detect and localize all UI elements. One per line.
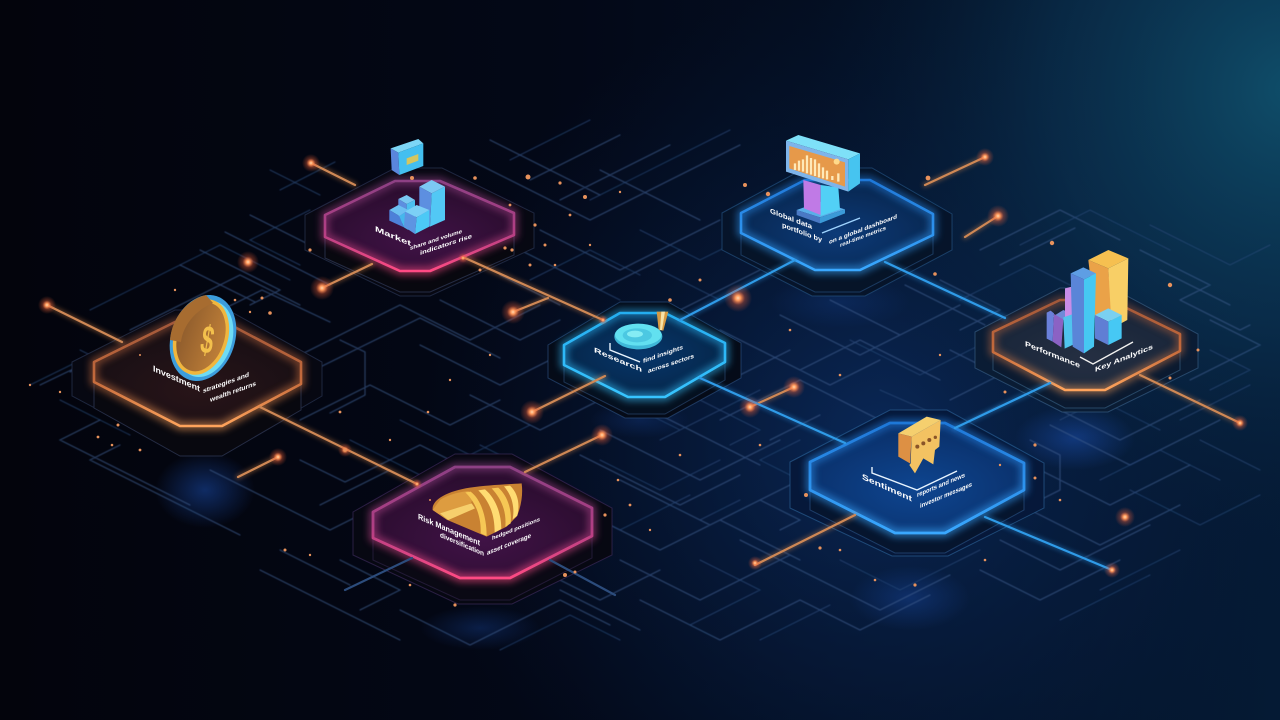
panel text <box>153 363 256 404</box>
light pools under the panels <box>155 276 1135 650</box>
panel glow <box>810 423 1024 533</box>
panel text: find insights <box>643 344 684 365</box>
panel text: Key Analytics <box>1095 342 1153 374</box>
icon: 3D bars <box>1047 250 1128 353</box>
panel text: indicators rise <box>420 233 473 257</box>
panel text: hedged positions <box>492 517 540 542</box>
panel glow <box>373 467 592 578</box>
panel text <box>862 471 972 510</box>
panel text: Research <box>594 345 642 374</box>
panel text <box>418 511 540 558</box>
panel text <box>375 224 473 257</box>
blue connectors <box>680 260 1112 570</box>
panel glow <box>325 181 514 271</box>
icon: gold coin: $ <box>198 317 218 363</box>
panel text: Investment <box>153 363 200 394</box>
panel text <box>1025 339 1153 374</box>
icon: magnifier lens <box>614 312 668 349</box>
panel text: real-time metrics <box>840 226 886 249</box>
panel text <box>770 206 897 249</box>
glowing nodes <box>38 148 1248 578</box>
panel text: on a global dashboard <box>829 213 897 246</box>
panel text: diversification <box>440 530 484 558</box>
panel text: across sectors <box>648 353 695 375</box>
particle sparks <box>29 174 1199 607</box>
circuit board trace network <box>30 120 1270 650</box>
icon: chat bubble <box>898 417 941 473</box>
panel text: Sentiment <box>862 471 912 504</box>
icon: isometric bar chart <box>389 180 445 234</box>
panel text <box>594 344 695 375</box>
panel text: share and volume <box>410 229 462 252</box>
icon: gold coin <box>159 286 247 390</box>
panel: market bars <box>305 139 534 296</box>
panel text: reports and news <box>917 472 965 499</box>
panel: messaging <box>790 410 1044 556</box>
panel: wedge <box>353 454 612 604</box>
panel glow <box>94 322 301 426</box>
bracket line <box>822 218 860 233</box>
panel text: Performance <box>1025 339 1081 370</box>
panel text: investor messages <box>920 481 972 510</box>
panel text: Market <box>375 224 412 248</box>
connector glow <box>47 157 1240 570</box>
connector lines <box>47 157 1240 595</box>
panel: search <box>548 302 741 418</box>
bracket line <box>610 343 640 362</box>
panel text: wealth returns <box>209 380 256 404</box>
panel text: strategies and <box>203 372 249 395</box>
panel text: asset coverage <box>487 533 531 557</box>
panel glow <box>993 300 1180 390</box>
panel glow <box>564 313 725 397</box>
dim connectors <box>345 558 615 595</box>
panel: dashboard <box>722 135 952 296</box>
bracket line <box>1080 342 1133 364</box>
panel glow <box>741 180 933 270</box>
panel text: Risk Management <box>418 511 480 548</box>
bracket line <box>872 467 957 490</box>
icon: billboard display <box>786 135 860 223</box>
panel text: portfolio by <box>782 220 822 244</box>
panel text: Global data <box>770 206 813 231</box>
icon: gold wedge <box>433 483 522 537</box>
orange connectors <box>47 157 1240 565</box>
icon: floating cube <box>391 139 423 175</box>
panel: analytics <box>975 250 1198 412</box>
panel: coin <box>72 286 322 456</box>
